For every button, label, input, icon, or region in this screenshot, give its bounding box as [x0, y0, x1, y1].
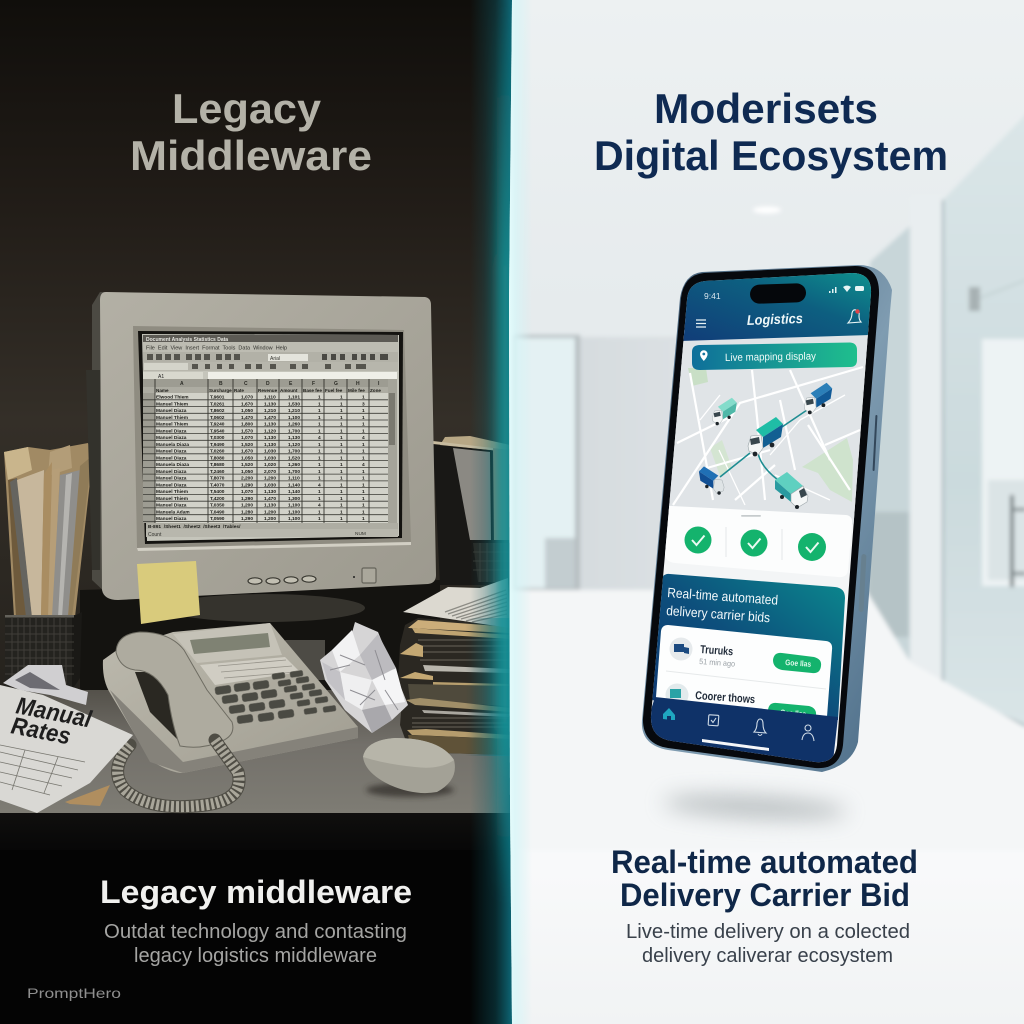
spreadsheet on CRT screen: 1,570: [241, 428, 253, 434]
spreadsheet on CRT screen: 1: [340, 435, 343, 441]
spreadsheet on CRT screen: Mile fee: [348, 388, 365, 393]
spreadsheet on CRT screen: 1,130: [288, 435, 300, 441]
spreadsheet on CRT screen: Manuela Diaza: [156, 442, 189, 448]
spreadsheet on CRT screen: 3: [362, 401, 365, 407]
spreadsheet on CRT screen: 1: [340, 408, 343, 414]
spreadsheet on CRT screen: Manuel Diaza: [156, 469, 187, 475]
heading: Moderisets Digital Ecosystem: [594, 85, 948, 179]
spreadsheet on CRT screen: 1: [362, 502, 365, 508]
spreadsheet on CRT screen: 1: [340, 502, 343, 508]
spreadsheet on CRT screen: 1,290: [241, 516, 253, 522]
spreadsheet on CRT screen: Manuel Diaza: [156, 455, 187, 461]
spreadsheet on CRT screen: 1,030: [264, 455, 276, 461]
spreadsheet on CRT screen: Manuela Diaza: [156, 462, 189, 468]
spreadsheet on CRT screen: 1: [340, 469, 343, 475]
status time: 9:41: [704, 291, 721, 301]
phone metal frame: [642, 265, 892, 772]
left file folders in wire holder: [4, 443, 93, 690]
notification bell: [848, 309, 861, 323]
spreadsheet on CRT screen: 1: [318, 462, 321, 468]
spreadsheet on CRT screen: A: [180, 381, 184, 387]
spreadsheet on CRT screen: 1: [340, 428, 343, 434]
nav icon: tasks: [708, 715, 719, 726]
spreadsheet on CRT screen: 1: [340, 455, 343, 461]
watermark: PromptHero: [27, 985, 121, 1001]
spreadsheet on CRT screen: 1,070: [241, 435, 253, 441]
caption: real-time automated delivery carrier bid: delivery caliverar ecosystem: [642, 945, 893, 967]
spreadsheet on CRT screen: 1: [340, 476, 343, 482]
carrier bids heading: [666, 585, 779, 625]
heading: Moderisets Digital Ecosystem: Moderisets: [654, 85, 878, 132]
sheet labelled Manual Rates: Manual: [14, 692, 95, 734]
spreadsheet on CRT screen: 1,200: [241, 502, 253, 508]
spreadsheet on CRT screen: T,0490: [210, 509, 225, 515]
app header bar: [680, 265, 880, 341]
spreadsheet on CRT screen: 1,130: [264, 401, 276, 407]
stack of paper files: [398, 578, 512, 756]
bid row: Coorer thows: Goe Ilas: [780, 708, 807, 719]
spreadsheet on CRT screen: T,9240: [210, 422, 225, 428]
spreadsheet on CRT screen: F: [312, 381, 315, 387]
spreadsheet on CRT screen: 1: [318, 516, 321, 522]
carrier bids panel: [650, 574, 845, 730]
spreadsheet on CRT screen: Manuela Adam: [156, 509, 190, 515]
dynamic island: [750, 283, 806, 304]
crumpled paper behind the rate sheet: [3, 665, 88, 705]
spreadsheet on CRT screen: 1: [318, 469, 321, 475]
spreadsheet on CRT screen: 1,210: [264, 408, 276, 414]
sticky note: [137, 561, 200, 624]
live mapping pill: Live mapping display: [725, 350, 817, 364]
spreadsheet on CRT screen: NUM: [355, 531, 366, 537]
spreadsheet on CRT screen: Manuel Diaza: [156, 428, 187, 434]
telephone keypad: [215, 670, 336, 724]
check badge 3: [798, 533, 826, 561]
spreadsheet on CRT screen: T,9540: [210, 428, 225, 434]
signal, wifi and battery icons: [829, 286, 864, 293]
spreadsheet on CRT screen: 1: [318, 415, 321, 421]
spreadsheet on CRT screen: 1: [362, 394, 365, 400]
spreadsheet on CRT screen: T,9490: [210, 442, 225, 448]
spreadsheet on CRT screen: 1: [362, 408, 365, 414]
spreadsheet on CRT screen: 1,110: [264, 394, 276, 400]
spreadsheet on CRT screen: Manuel Thiem: [156, 415, 188, 421]
heading: Moderisets Digital Ecosystem: Digital Ecosystem: [594, 132, 948, 179]
spreadsheet on CRT screen: 1: [318, 401, 321, 407]
map truck: dark blue: [804, 383, 832, 414]
spreadsheet on CRT screen: 1,260: [288, 462, 300, 468]
spreadsheet on CRT screen: D: [266, 381, 270, 387]
smartphone: [640, 265, 892, 772]
bid row: Coorer thows: [666, 684, 816, 723]
spreadsheet on CRT screen: Arial: [270, 356, 280, 362]
nav icon: bell: [754, 719, 766, 736]
spreadsheet on CRT screen: T,0300: [210, 435, 225, 441]
spreadsheet on CRT screen: T,9601: [210, 394, 225, 400]
spreadsheet on CRT screen: C: [244, 381, 248, 387]
spreadsheet on CRT screen: 1,101: [288, 394, 300, 400]
spreadsheet on CRT screen: 1: [340, 448, 343, 454]
spreadsheet on CRT screen: 1: [340, 516, 343, 522]
spreadsheet on CRT screen: 1: [362, 469, 365, 475]
map truck: blue lower left: [699, 466, 724, 495]
spreadsheet on CRT screen: 1: [318, 509, 321, 515]
caption: real-time automated delivery carrier bid: Live-time delivery on a colected: [626, 921, 910, 943]
spreadsheet on CRT screen: 1,030: [264, 482, 276, 488]
spreadsheet on CRT screen: 1,800: [241, 422, 253, 428]
spreadsheet on CRT screen: 1: [362, 448, 365, 454]
delivery status card: [665, 506, 852, 577]
spreadsheet on CRT screen: 4: [318, 482, 321, 488]
spreadsheet on CRT screen: Fuel fee: [325, 388, 343, 393]
menu icon: [696, 320, 706, 327]
spreadsheet on CRT screen: 1,140: [288, 482, 300, 488]
spreadsheet on CRT screen: [142, 334, 399, 541]
spreadsheet on CRT screen: 1,050: [241, 408, 253, 414]
spreadsheet on CRT screen: E: [289, 381, 293, 387]
spreadsheet on CRT screen: Manuel Thiem: [156, 422, 188, 428]
spreadsheet on CRT screen: 1,050: [241, 469, 253, 475]
spreadsheet on CRT screen: 1: [340, 422, 343, 428]
spreadsheet on CRT screen: T,0602: [210, 415, 225, 421]
map truck: teal lower right: [775, 472, 808, 509]
spreadsheet on CRT screen: Manuel Diaza: [156, 502, 187, 508]
desk surface: [0, 690, 512, 1024]
spreadsheet on CRT screen: T,0590: [210, 516, 225, 522]
spreadsheet on CRT screen: 1: [362, 442, 365, 448]
spreadsheet on CRT screen: Base fee: [303, 388, 322, 393]
hallway background: [518, 117, 1024, 728]
phone shadow on floor: [663, 791, 847, 823]
spreadsheet on CRT screen: 1,200: [264, 516, 276, 522]
spreadsheet on CRT screen: 1,070: [241, 394, 253, 400]
caption: real-time automated delivery carrier bid: Delivery Carrier Bid: [620, 877, 910, 913]
desk telephone: [103, 623, 358, 773]
carrier bid list card: [655, 625, 832, 730]
spreadsheet on CRT screen: Manuel Diaza: [156, 516, 187, 522]
spreadsheet on CRT screen: 1,100: [288, 516, 300, 522]
spreadsheet on CRT screen: Amount: [280, 388, 298, 393]
spreadsheet on CRT screen: 1,280: [241, 509, 253, 515]
spreadsheet on CRT screen: 1,130: [264, 435, 276, 441]
spreadsheet on CRT screen: 1,120: [288, 442, 300, 448]
spreadsheet on CRT screen: 1: [362, 482, 365, 488]
spreadsheet on CRT screen: 1: [318, 455, 321, 461]
spreadsheet on CRT screen: 1,470: [241, 415, 253, 421]
spreadsheet on CRT screen: H: [356, 381, 360, 387]
telephone handset: [116, 632, 233, 747]
spreadsheet on CRT screen: Rate: [234, 388, 244, 393]
app title: Logistics: [747, 310, 803, 328]
spreadsheet on CRT screen: 4: [362, 462, 365, 468]
spreadsheet on CRT screen: 1: [362, 489, 365, 495]
phone black bezel: [643, 266, 879, 768]
spreadsheet on CRT screen: 1,700: [288, 448, 300, 454]
tan envelope under the rate sheet: [65, 785, 110, 806]
heading: Legacy Middleware: [132, 94, 370, 170]
spreadsheet on CRT screen: 1,130: [264, 442, 276, 448]
caption: real-time automated delivery carrier bid: [611, 844, 918, 967]
caption: legacy middleware: Legacy middleware: [100, 874, 412, 910]
spreadsheet on CRT screen: 1: [318, 394, 321, 400]
phone screen: [650, 273, 872, 762]
bottom navigation bar: [640, 697, 838, 770]
caption: legacy middleware: legacy logistics middleware: [134, 945, 377, 967]
spreadsheet on CRT screen: 1: [362, 415, 365, 421]
caption: legacy middleware: Outdat technology and contasting: [104, 921, 407, 943]
spreadsheet on CRT screen: 1,100: [288, 502, 300, 508]
spreadsheet on CRT screen: 1,520: [241, 442, 253, 448]
check badge 2: [740, 530, 768, 556]
spreadsheet on CRT screen: 1: [318, 428, 321, 434]
monitor front buttons: [248, 568, 376, 584]
spreadsheet on CRT screen: 1: [318, 496, 321, 502]
cyan divider glow, left side: [470, 0, 513, 1024]
spreadsheet on CRT screen: A1: [158, 374, 164, 380]
sheet labelled Manual Rates: [0, 685, 133, 813]
spreadsheet on CRT screen: 1,100: [288, 415, 300, 421]
spreadsheet on CRT screen: 1: [340, 462, 343, 468]
spreadsheet on CRT screen: 1: [340, 401, 343, 407]
spreadsheet on CRT screen: 1,520: [241, 462, 253, 468]
spreadsheet on CRT screen: 1: [362, 509, 365, 515]
spreadsheet on CRT screen: 1,200: [264, 509, 276, 515]
spreadsheet on CRT screen: 1,020: [264, 462, 276, 468]
spreadsheet on CRT screen: T,5400: [210, 489, 225, 495]
bid row: Truruks: 51 min ago: [699, 657, 736, 669]
map truck: light teal: [712, 398, 737, 425]
live mapping pill: [692, 342, 857, 370]
spreadsheet on CRT screen: T,8080: [210, 455, 225, 461]
home indicator: [702, 739, 769, 751]
spreadsheet on CRT screen: 1,210: [288, 408, 300, 414]
spreadsheet on CRT screen: 1: [340, 482, 343, 488]
spreadsheet on CRT screen: Count: [148, 532, 162, 538]
spreadsheet on CRT screen: Manuel Thiem: [156, 496, 188, 502]
spreadsheet on CRT screen: T,0261: [210, 401, 225, 407]
bid row: Coorer thows: Coorer thows: [695, 690, 755, 706]
crumpled paper ball: [320, 622, 408, 733]
spreadsheet on CRT screen: 2,200: [241, 476, 253, 482]
spreadsheet on CRT screen: T,0260: [210, 448, 225, 454]
spreadsheet on CRT screen: 1,470: [264, 415, 276, 421]
spreadsheet on CRT screen: 1: [362, 496, 365, 502]
spreadsheet on CRT screen: 1: [340, 442, 343, 448]
spreadsheet on CRT screen: T,8070: [210, 476, 225, 482]
spreadsheet on CRT screen: 1: [362, 476, 365, 482]
spreadsheet on CRT screen: Zone: [370, 388, 381, 393]
spreadsheet on CRT screen: 1,130: [264, 489, 276, 495]
panel: digital ecosystem (bright right side): [505, 0, 1024, 1024]
spreadsheet on CRT screen: 4: [362, 435, 365, 441]
spreadsheet on CRT screen: 1,670: [241, 448, 253, 454]
spreadsheet on CRT screen: 1: [340, 509, 343, 515]
spreadsheet on CRT screen: Document Analysis Statistics Data: [146, 337, 228, 343]
spreadsheet on CRT screen: Manuel Thiem: [156, 489, 188, 495]
spreadsheet on CRT screen: 4: [318, 502, 321, 508]
spreadsheet on CRT screen: 1,030: [264, 448, 276, 454]
bid row: Truruks: Truruks: [700, 644, 734, 658]
spreadsheet on CRT screen: 1,130: [264, 502, 276, 508]
spreadsheet on CRT screen: T,2460: [210, 469, 225, 475]
spreadsheet on CRT screen: 1,530: [288, 401, 300, 407]
spreadsheet on CRT screen: 1,700: [288, 469, 300, 475]
app map: [668, 326, 869, 524]
spreadsheet on CRT screen: Manuel Diaza: [156, 476, 187, 482]
spreadsheet on CRT screen: 2,070: [264, 469, 276, 475]
carrier bids heading: Real-time automated: [667, 585, 779, 608]
spreadsheet on CRT screen: 1: [318, 476, 321, 482]
spreadsheet on CRT screen: B: [219, 381, 223, 387]
spreadsheet on CRT screen: 1,050: [241, 455, 253, 461]
spreadsheet on CRT screen: 1,290: [241, 482, 253, 488]
cyan divider glow, right side: [509, 0, 528, 1024]
bid row: Truruks: [670, 638, 821, 673]
spreadsheet on CRT screen: T,8680: [210, 462, 225, 468]
spreadsheet on CRT screen: Manuel Diaza: [156, 482, 187, 488]
spreadsheet on CRT screen: Manuel Diaza: [156, 448, 187, 454]
spreadsheet on CRT screen: 1,260: [288, 422, 300, 428]
nav icon: profile: [802, 725, 814, 741]
sheet labelled Manual Rates: Rates: [9, 712, 73, 750]
spreadsheet on CRT screen: T,4200: [210, 496, 225, 502]
spreadsheet on CRT screen: T,0350: [210, 502, 225, 508]
spreadsheet on CRT screen: 1,700: [288, 428, 300, 434]
spreadsheet on CRT screen: B-891 /Sheet1 /Sheet2 /Sheet3 /Tables/: [148, 524, 241, 530]
heading: Legacy Middleware: Legacy: [172, 85, 322, 132]
spreadsheet on CRT screen: Manuel Diaza: [156, 408, 187, 414]
spreadsheet on CRT screen: 1,100: [288, 509, 300, 515]
CRT monitor: [86, 292, 436, 622]
spreadsheet on CRT screen: I: [378, 381, 380, 387]
bid row: Truruks: Goe Ilas: [785, 658, 812, 669]
right file folders in wire holder: [433, 436, 510, 585]
spreadsheet on CRT screen: Surcharge: [209, 388, 232, 393]
spreadsheet on CRT screen: 1,470: [264, 496, 276, 502]
spreadsheet on CRT screen: 1: [318, 408, 321, 414]
spreadsheet on CRT screen: 1: [318, 422, 321, 428]
caption: legacy middleware: [100, 874, 412, 967]
map truck: large centre teal: [748, 417, 783, 456]
spreadsheet on CRT screen: 1: [318, 489, 321, 495]
heading: Legacy Middleware: Middleware: [130, 132, 372, 179]
spreadsheet on CRT screen: Name: [156, 388, 169, 393]
spreadsheet on CRT screen: 1,110: [288, 476, 300, 482]
spreadsheet on CRT screen: G: [334, 381, 338, 387]
spreadsheet on CRT screen: 1,300: [288, 496, 300, 502]
spreadsheet on CRT screen: 1,670: [241, 401, 253, 407]
spreadsheet on CRT screen: 1,200: [264, 476, 276, 482]
computer mouse: [363, 738, 455, 797]
spreadsheet on CRT screen: 1: [362, 516, 365, 522]
shadow area beneath the monitor: [80, 580, 440, 700]
side buttons: [858, 415, 877, 612]
spreadsheet on CRT screen: 1: [318, 442, 321, 448]
spreadsheet on CRT screen: 1: [340, 415, 343, 421]
nav icon: home: [663, 708, 675, 720]
check badge 1: [684, 526, 712, 554]
spreadsheet on CRT screen: 1: [362, 428, 365, 434]
spreadsheet on CRT screen: 1,070: [241, 489, 253, 495]
phone riser block behind telephone: [285, 640, 325, 680]
caption: real-time automated delivery carrier bid: Real-time automated: [611, 844, 918, 880]
spreadsheet on CRT screen: T,8602: [210, 408, 225, 414]
spreadsheet on CRT screen: Elwood Thiem: [156, 394, 189, 400]
spreadsheet on CRT screen: Manuel Thiem: [156, 401, 188, 407]
spreadsheet on CRT screen: 4: [318, 435, 321, 441]
spreadsheet on CRT screen: 1: [318, 448, 321, 454]
spreadsheet on CRT screen: 1,130: [264, 422, 276, 428]
spreadsheet on CRT screen: 1,120: [264, 428, 276, 434]
panel: legacy middleware (dark left side): [0, 0, 513, 1024]
spreadsheet on CRT screen: Revenue: [258, 388, 278, 393]
coiled telephone cord: [118, 740, 239, 807]
spreadsheet on CRT screen: Manuel Diaza: [156, 435, 187, 441]
spreadsheet on CRT screen: 1,290: [241, 496, 253, 502]
spreadsheet on CRT screen: 1: [340, 489, 343, 495]
spreadsheet on CRT screen: 1: [340, 394, 343, 400]
spreadsheet on CRT screen: 1: [362, 455, 365, 461]
spreadsheet on CRT screen: 1: [340, 496, 343, 502]
spreadsheet on CRT screen: 1: [362, 422, 365, 428]
spreadsheet on CRT screen: File Edit View Insert Format Tools Data Window Help: [146, 346, 287, 352]
spreadsheet on CRT screen: T,4070: [210, 482, 225, 488]
carrier bids heading: delivery carrier bids: [666, 603, 771, 625]
spreadsheet on CRT screen: 1,520: [288, 455, 300, 461]
spreadsheet on CRT screen: 1,140: [288, 489, 300, 495]
